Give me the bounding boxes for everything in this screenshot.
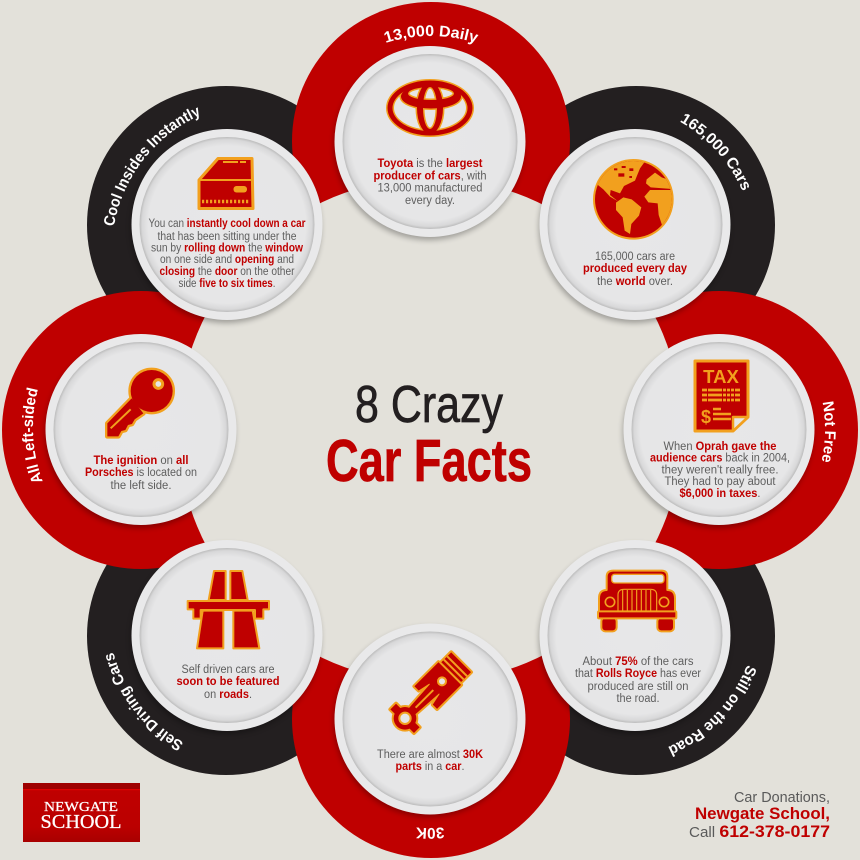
arc: All Left-sided xyxy=(2,291,280,569)
text: Porsche fact: Porsches is located on xyxy=(85,467,197,479)
arc: 165,000 Cars xyxy=(497,86,775,364)
icon: highway xyxy=(188,571,269,648)
icon: Toyota logo xyxy=(388,80,472,136)
text: self driving fact xyxy=(176,664,280,701)
label: 13,000 Daily: 13,000 Daily xyxy=(384,25,478,44)
panel: 165,000 cars xyxy=(539,129,730,323)
label: Cool Insides Instantly: Cool Insides Instantly xyxy=(104,107,199,226)
icon: tax document: $ xyxy=(701,407,711,427)
text: parts fact xyxy=(377,749,484,773)
text: self driving fact: soon to be featured xyxy=(176,676,280,688)
icon: key xyxy=(107,370,173,436)
icon: car door xyxy=(199,158,253,208)
text: parts fact: parts in a car. xyxy=(396,761,464,773)
text: Oprah fact xyxy=(650,441,790,500)
label: Not Free: Not Free xyxy=(822,401,836,462)
arc: 13,000 Daily xyxy=(292,2,570,280)
text: parts fact: There are almost 30K xyxy=(377,749,484,761)
panel: Toyota xyxy=(334,46,526,240)
contact text xyxy=(689,790,830,841)
text: cool down fact: closing the door on the other xyxy=(160,266,295,278)
text: Porsche fact: the left side. xyxy=(110,480,172,492)
title: Car Facts xyxy=(326,428,532,494)
text: Toyota fact: Toyota is the largest xyxy=(378,158,483,170)
text: Oprah fact: audience cars back in 2004, xyxy=(650,452,790,464)
icon: globe xyxy=(593,159,674,240)
logo: Newgate School: SCHOOL xyxy=(40,811,122,833)
text: Rolls Royce fact: produced are still on xyxy=(588,681,688,693)
text: Rolls Royce fact: that Rolls Royce has ever xyxy=(575,668,701,680)
text: Toyota fact: every day. xyxy=(405,195,455,207)
text: self driving fact: on roads. xyxy=(204,689,252,701)
panel: 30K parts xyxy=(334,624,526,817)
logo: Newgate School: NEWGATE xyxy=(44,799,118,814)
text: production fact: produced every day xyxy=(583,263,688,275)
icon: tax document xyxy=(695,361,748,431)
icon: vintage car xyxy=(598,571,676,631)
text: production fact: 165,000 cars are xyxy=(595,251,675,263)
text: cool down fact: side five to six times. xyxy=(178,278,275,290)
text: production fact xyxy=(583,251,688,288)
text: Oprah fact: $6,000 in taxes. xyxy=(680,488,760,500)
panel: Rolls Royce xyxy=(539,540,730,734)
text: self driving fact: Self driven cars are xyxy=(182,664,274,676)
text: Porsche fact xyxy=(85,455,197,492)
label: Still on the Road: Still on the Road xyxy=(668,666,756,757)
text: Porsche fact: The ignition on all xyxy=(94,455,188,467)
label: 30K: 30K xyxy=(416,828,444,839)
contact text: Car Donations, xyxy=(734,790,830,806)
label: 165,000 Cars: 165,000 Cars xyxy=(680,114,749,190)
text: cool down fact: You can instantly cool down a car xyxy=(148,218,306,230)
text: Oprah fact: When Oprah gave the xyxy=(664,441,776,453)
arc: 30K xyxy=(292,580,570,858)
contact text: Newgate School, xyxy=(695,804,830,823)
text: cool down fact xyxy=(148,218,306,290)
contact text: Call 612-378-0177 xyxy=(689,822,830,841)
arc: Not Free xyxy=(580,291,858,569)
panel: cool insides xyxy=(131,129,322,323)
centre cut-out xyxy=(178,178,682,682)
arc: Still on the Road xyxy=(497,497,775,775)
title xyxy=(326,376,532,494)
text: cool down fact: that has been sitting under the xyxy=(158,231,296,243)
text: Oprah fact: they weren't really free. xyxy=(662,464,778,476)
text: Rolls Royce fact xyxy=(575,656,701,705)
text: Rolls Royce fact: the road. xyxy=(616,693,660,705)
icon: tax document: TAX xyxy=(703,366,739,387)
panel: Oprah taxes xyxy=(623,334,814,528)
text: Oprah fact: They had to pay about xyxy=(664,476,776,488)
title: 8 Crazy xyxy=(355,376,503,434)
text: Toyota fact: 13,000 manufactured xyxy=(378,182,482,194)
panel: self driving cars xyxy=(131,540,322,734)
logo: Newgate School xyxy=(23,783,140,842)
text: cool down fact: on one side and opening and xyxy=(160,254,294,266)
arc: Self Driving Cars xyxy=(87,497,365,775)
arc: Cool Insides Instantly xyxy=(87,86,365,364)
text: Rolls Royce fact: About 75% of the cars xyxy=(582,656,694,668)
label: Self Driving Cars: Self Driving Cars xyxy=(106,653,182,750)
label: All Left-sided: All Left-sided xyxy=(22,388,43,482)
text: production fact: the world over. xyxy=(597,276,673,288)
text: Toyota fact xyxy=(374,158,486,207)
text: cool down fact: sun by rolling down the window xyxy=(151,242,303,254)
icon: piston xyxy=(385,650,473,738)
text: Toyota fact: producer of cars, with xyxy=(374,170,486,182)
panel: Porsche ignition xyxy=(45,334,236,528)
